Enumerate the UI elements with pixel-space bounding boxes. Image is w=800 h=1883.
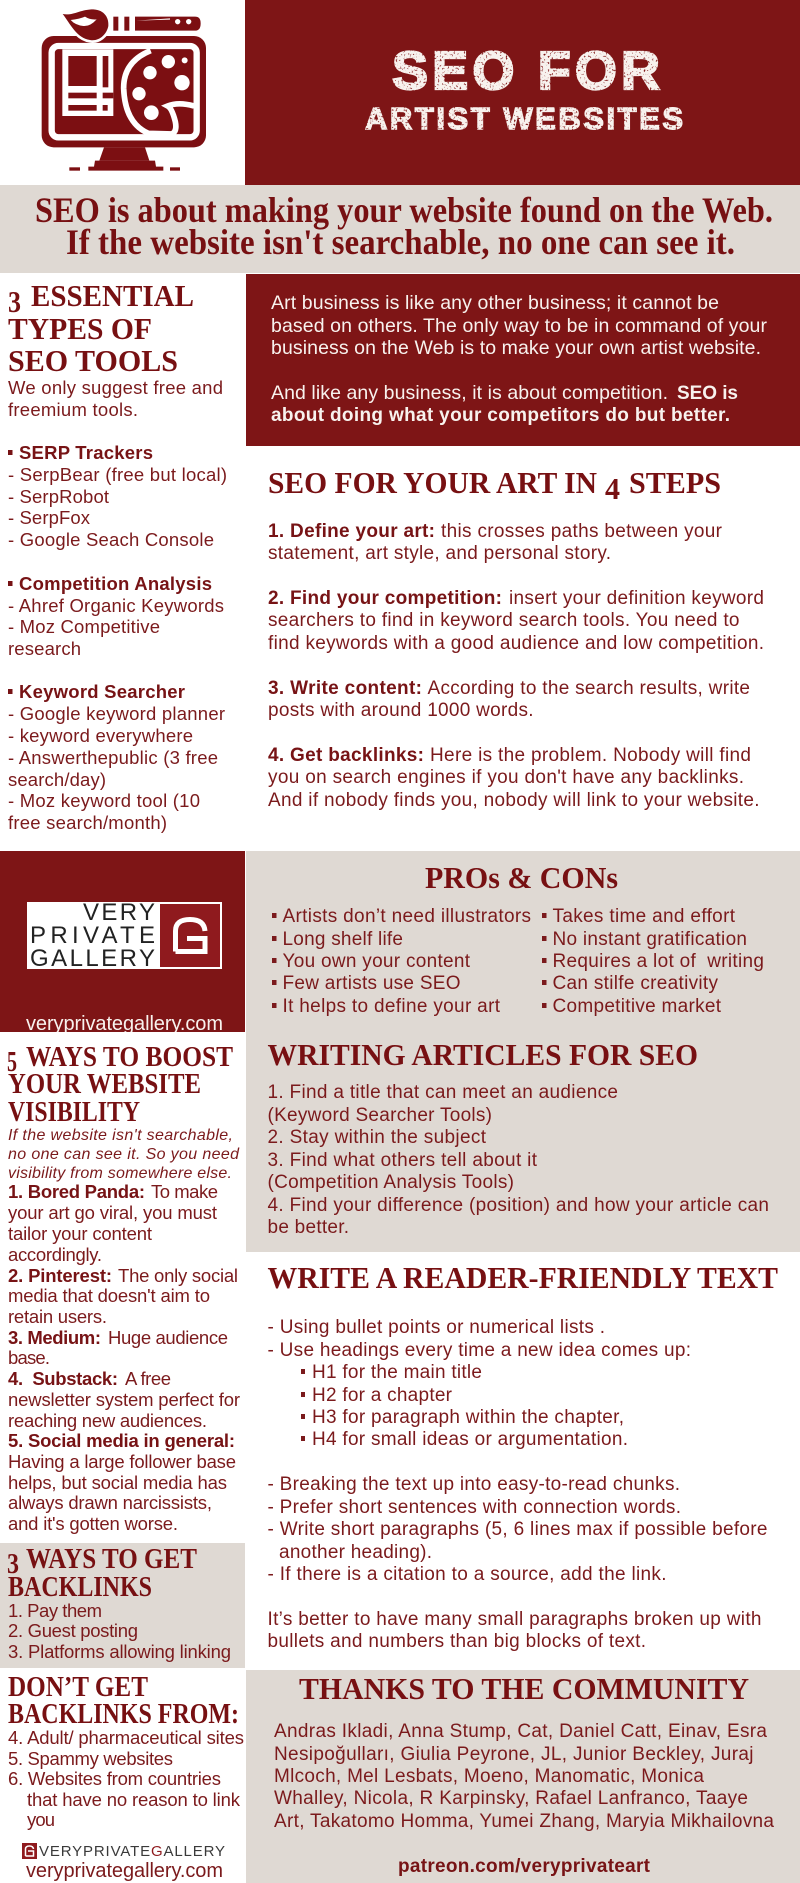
panel: title banner xyxy=(245,0,800,185)
item: Bored Panda xyxy=(8,1181,218,1265)
item: Bored Panda: To make xyxy=(151,1181,218,1202)
step 2: 2. Find your competition: xyxy=(268,588,502,609)
list: pros: Few artists use SEO xyxy=(282,973,460,994)
list: bad backlink sources xyxy=(8,1727,244,1830)
text: community names: Mlcoch, Mel Lesbats, Moeno, Manomatic, Monica xyxy=(274,1766,704,1787)
text: visibility intro: visibility from somewhere else. xyxy=(8,1165,232,1182)
text: community names: Andras Ikladi, Anna Stump, Cat, Daniel Catt, Einav, Esra xyxy=(274,1721,767,1742)
text: visibility intro: no one can see it. So you need xyxy=(8,1146,240,1163)
list: writing articles: 1. Find a title that can meet an audience xyxy=(268,1082,618,1103)
item: social media: 5. Social media in general: xyxy=(8,1430,235,1451)
list: keyword searcher: - keyword everywhere xyxy=(8,725,193,746)
text: intro paragraphs xyxy=(271,292,768,426)
list: SERP trackers: SERP Trackers xyxy=(19,442,153,463)
step 1: statement, art style, and personal story. xyxy=(268,543,611,564)
text: intro paragraphs: about doing what your competitors do but better. xyxy=(271,405,730,426)
text: closing advice xyxy=(268,1609,762,1652)
list: writing tips: - Breaking the text up into easy-to-read chunks. xyxy=(268,1474,680,1495)
item: Bored Panda: accordingly. xyxy=(8,1244,102,1265)
heading: 3 ways to get backlinks: BACKLINKS xyxy=(8,1572,152,1603)
step 2: searchers to find in keyword search tools. You need to xyxy=(268,610,740,631)
heading: SEO for your art in 4 steps: 4 xyxy=(605,471,620,506)
list: competition analysis: - Ahref Organic Keywords xyxy=(8,595,224,616)
heading: thanks to the community: THANKS TO THE COMMUNITY xyxy=(299,1671,749,1706)
item: Pinterest: 2. Pinterest: xyxy=(8,1265,112,1286)
text: tools intro: We only suggest free and xyxy=(8,377,223,398)
list: SERP trackers xyxy=(8,442,227,550)
item: Substack: newsletter system perfect for xyxy=(8,1389,240,1410)
text: tools intro xyxy=(8,377,223,420)
list: pros: It helps to define your art xyxy=(282,996,501,1017)
step 3: According to the search results, write xyxy=(428,678,750,699)
list: cons: Can stilfe creativity xyxy=(552,973,718,994)
heading: 5 ways to boost: WAYS TO BOOST xyxy=(26,1042,233,1073)
item: social media: and it's gotten worse. xyxy=(8,1513,178,1534)
item: Medium: Huge audience xyxy=(108,1327,228,1348)
list: SERP trackers: - SerpRobot xyxy=(8,486,109,507)
title: SEO for artist websites xyxy=(365,41,683,136)
step 3: posts with around 1000 words. xyxy=(268,700,534,721)
list: cons: Competitive market xyxy=(552,996,722,1017)
list: bad backlink sources: you xyxy=(27,1809,55,1830)
heading: SEO for your art in 4 steps: STEPS xyxy=(629,465,721,500)
step 4: Here is the problem. Nobody will find xyxy=(430,745,751,766)
text: intro paragraphs: Art business is like any other business; it cannot be xyxy=(271,292,719,314)
list: writing tips: - If there is a citation to a source, add the link. xyxy=(268,1564,666,1585)
heading: 5 ways to boost xyxy=(7,1042,233,1128)
text: intro paragraphs: SEO is xyxy=(677,383,738,404)
step 2: insert your definition keyword xyxy=(509,588,764,609)
item: social media xyxy=(8,1430,236,1534)
text: tools intro: freemium tools. xyxy=(8,399,138,420)
list: cons xyxy=(542,906,764,1017)
heading: essential types of SEO tools: ESSENTIAL xyxy=(31,278,194,313)
text: visibility intro xyxy=(8,1127,240,1182)
list: pros: You own your content xyxy=(282,951,471,972)
text: community names xyxy=(274,1721,774,1832)
item: Medium: base. xyxy=(8,1347,50,1368)
text: closing advice: bullets and numbers than big blocks of text. xyxy=(268,1631,646,1652)
text: visibility intro: If the website isn't searchable, xyxy=(8,1127,233,1144)
list: bad backlink sources: that have no reason to link xyxy=(27,1789,241,1810)
list: formatting tips: - Use headings every time a new idea comes up: xyxy=(268,1340,691,1361)
heading: writing articles for SEO: WRITING ARTICLES FOR SEO xyxy=(268,1037,698,1072)
text: community names: Nesipoğulları, Giulia Peyrone, JL, Junior Beckley, Juraj xyxy=(274,1744,754,1765)
panel: don't get backlinks from xyxy=(8,1672,244,1882)
item: Bored Panda: 1. Bored Panda: xyxy=(8,1181,145,1202)
panel: essential SEO tools xyxy=(8,278,227,833)
list: SERP trackers: - Google Seach Console xyxy=(8,529,214,550)
list: writing articles: (Competition Analysis Tools) xyxy=(268,1172,514,1193)
item: Bored Panda: tailor your content xyxy=(8,1223,152,1244)
title: SEO for artist websites: ARTIST WEBSITES xyxy=(365,101,683,136)
text: gallery url: veryprivategallery.com xyxy=(26,1013,223,1035)
tagline: If the website isn't searchable, no one can see it. xyxy=(66,222,735,262)
heading: essential types of SEO tools: 3 xyxy=(8,284,21,319)
logo: small gallery wordmark: VERYPRIVATEGALLERY xyxy=(39,1843,225,1860)
heading: essential types of SEO tools: SEO TOOLS xyxy=(8,343,178,378)
item: Pinterest: The only social xyxy=(118,1265,238,1286)
list: writing tips xyxy=(268,1474,768,1585)
step 1 xyxy=(268,521,723,564)
item: Pinterest xyxy=(8,1265,238,1327)
heading: 3 ways to get backlinks xyxy=(7,1544,197,1603)
heading: 5 ways to boost: YOUR WEBSITE xyxy=(8,1069,201,1100)
list: writing articles: 4. Find your difference (position) and how your article can xyxy=(268,1195,769,1216)
list: backlink ways xyxy=(8,1600,231,1662)
heading: SEO for your art in 4 steps xyxy=(268,465,721,506)
list: cons: No instant gratification xyxy=(552,929,747,950)
list: writing articles xyxy=(268,1082,769,1238)
list: competition analysis: Competition Analysis xyxy=(19,573,212,594)
heading: write a reader-friendly text: WRITE A READER-FRIENDLY TEXT xyxy=(268,1260,778,1295)
list: cons: Requires a lot of writing xyxy=(552,951,764,972)
text: intro paragraphs: And like any business, it is about competition. xyxy=(271,382,668,404)
heading: pros and cons: PROs & CONs xyxy=(425,860,618,895)
heading: don't get backlinks from: DON’T GET xyxy=(8,1672,148,1703)
list: SERP trackers: - SerpFox xyxy=(8,507,91,528)
heading: don't get backlinks from xyxy=(8,1672,239,1730)
logo: Very Private Gallery xyxy=(27,899,222,972)
item: Substack xyxy=(8,1368,240,1431)
title: SEO for artist websites: SEO FOR xyxy=(392,41,660,101)
list: backlink ways: 3. Platforms allowing linking xyxy=(8,1641,231,1662)
item: Medium xyxy=(8,1327,228,1368)
list: writing articles: 3. Find what others tell about it xyxy=(268,1150,538,1171)
item: Pinterest: media that doesn't aim to xyxy=(8,1285,210,1306)
panel: ways to get backlinks xyxy=(0,1543,245,1668)
item: Pinterest: retain users. xyxy=(8,1306,107,1327)
list: keyword searcher: Keyword Searcher xyxy=(19,681,185,702)
list: cons: Takes time and effort xyxy=(552,906,736,927)
list: competition analysis xyxy=(8,573,224,659)
item: social media: always drawn narcissists, xyxy=(8,1492,212,1513)
list: bad backlink sources: 4. Adult/ pharmaceutical sites xyxy=(8,1727,244,1748)
list: pros: Artists don’t need illustrators xyxy=(282,906,531,927)
list: formatting tips xyxy=(268,1317,691,1450)
heading: 5 ways to boost: 5 xyxy=(7,1047,17,1078)
list: keyword searcher xyxy=(8,681,225,833)
list: formatting tips: H2 for a chapter xyxy=(312,1385,453,1406)
logo: Very Private Gallery: PRIVATE xyxy=(30,922,155,949)
logo: Very Private Gallery: VERY xyxy=(83,899,155,926)
panel: tagline band xyxy=(0,185,800,273)
list: bad backlink sources: 5. Spammy websites xyxy=(8,1748,173,1769)
step 2: find keywords with a good audience and low competition. xyxy=(268,633,764,654)
list: formatting tips: H1 for the main title xyxy=(312,1362,482,1383)
logo: Very Private Gallery: GALLERY xyxy=(30,945,155,972)
heading: 5 ways to boost: VISIBILITY xyxy=(8,1097,140,1128)
text: community names: Art, Takatomo Homma, Yumei Zhang, Maryia Mikhailovna xyxy=(274,1811,774,1832)
panel: SEO in 4 steps xyxy=(268,465,764,811)
list: keyword searcher: - Google keyword planner xyxy=(8,703,225,724)
text: community names: Whalley, Nicola, R Karpinsky, Rafael Lanfranco, Taaye xyxy=(274,1788,748,1809)
item: Medium: 3. Medium: xyxy=(8,1327,101,1348)
text: patreon link: patreon.com/veryprivateart xyxy=(398,1856,651,1877)
item: Bored Panda: your art go viral, you must xyxy=(8,1202,217,1223)
step 4: And if nobody finds you, nobody will link to your website. xyxy=(268,790,760,811)
text: intro paragraphs: based on others. The only way to be in command of your xyxy=(271,315,768,337)
list: competition analysis: research xyxy=(8,638,81,659)
list: writing articles: 2. Stay within the subject xyxy=(268,1127,487,1148)
step 3 xyxy=(268,678,750,721)
item: social media: helps, but social media has xyxy=(8,1472,227,1493)
step 3: 3. Write content: xyxy=(268,678,422,699)
list: pros xyxy=(272,906,531,1017)
text: footer url: veryprivategallery.com xyxy=(26,1860,223,1882)
step 4 xyxy=(268,745,760,811)
step 4: you on search engines if you don't have any backlinks. xyxy=(268,767,744,788)
list: keyword searcher: free search/month) xyxy=(8,812,167,833)
item: social media: Having a large follower base xyxy=(8,1451,236,1472)
heading: don't get backlinks from: BACKLINKS FROM: xyxy=(8,1699,239,1730)
step 1: 1. Define your art: xyxy=(268,521,435,542)
text: intro paragraphs: business on the Web is to make your own artist website. xyxy=(271,337,761,359)
list: keyword searcher: search/day) xyxy=(8,769,106,790)
icon: monitor with palette and brush xyxy=(42,9,206,171)
list: formatting tips: H3 for paragraph within the chapter, xyxy=(312,1407,624,1428)
list: writing tips: - Write short paragraphs (5, 6 lines max if possible before xyxy=(268,1519,768,1540)
panel: thanks to the community xyxy=(246,1670,800,1883)
heading: essential types of SEO tools xyxy=(8,278,194,378)
list: keyword searcher: - Answerthepublic (3 free xyxy=(8,747,218,768)
panel: boost visibility xyxy=(0,1032,245,1543)
panel: gallery logo xyxy=(0,851,245,1035)
heading: essential types of SEO tools: TYPES OF xyxy=(8,311,152,346)
list: backlink ways: 2. Guest posting xyxy=(8,1620,138,1641)
text: closing advice: It’s better to have many small paragraphs broken up with xyxy=(268,1609,762,1630)
list: writing tips: another heading). xyxy=(279,1542,432,1563)
panel: reader-friendly text xyxy=(268,1260,778,1652)
item: Substack: A free xyxy=(125,1368,171,1389)
panel: art business intro xyxy=(246,274,800,446)
panel: pros, cons and writing articles xyxy=(246,851,800,1252)
step 2 xyxy=(268,588,764,654)
heading: 3 ways to get backlinks: WAYS TO GET xyxy=(26,1544,197,1575)
list: writing articles: be better. xyxy=(268,1217,349,1238)
step 4: 4. Get backlinks: xyxy=(268,745,424,766)
list: pros: Long shelf life xyxy=(282,929,403,950)
tagline xyxy=(35,190,773,262)
heading: 3 ways to get backlinks: 3 xyxy=(7,1549,19,1580)
list: formatting tips: - Using bullet points or numerical lists . xyxy=(268,1317,605,1338)
list: writing tips: - Prefer short sentences with connection words. xyxy=(268,1497,681,1518)
item: Substack: reaching new audiences. xyxy=(8,1410,207,1431)
step 1: this crosses paths between your xyxy=(441,521,723,542)
item: Substack: 4. Substack: xyxy=(8,1368,118,1389)
list: keyword searcher: - Moz keyword tool (10 xyxy=(8,790,200,811)
list: backlink ways: 1. Pay them xyxy=(8,1600,102,1621)
list: formatting tips: H4 for small ideas or argumentation. xyxy=(312,1429,628,1450)
list: competition analysis: - Moz Competitive xyxy=(8,616,160,637)
heading: SEO for your art in 4 steps: SEO FOR YOUR ART IN xyxy=(268,465,597,500)
list: SERP trackers: - SerpBear (free but local) xyxy=(8,464,227,485)
list: bad backlink sources: 6. Websites from countries xyxy=(8,1768,221,1789)
list: writing articles: (Keyword Searcher Tools) xyxy=(268,1105,492,1126)
